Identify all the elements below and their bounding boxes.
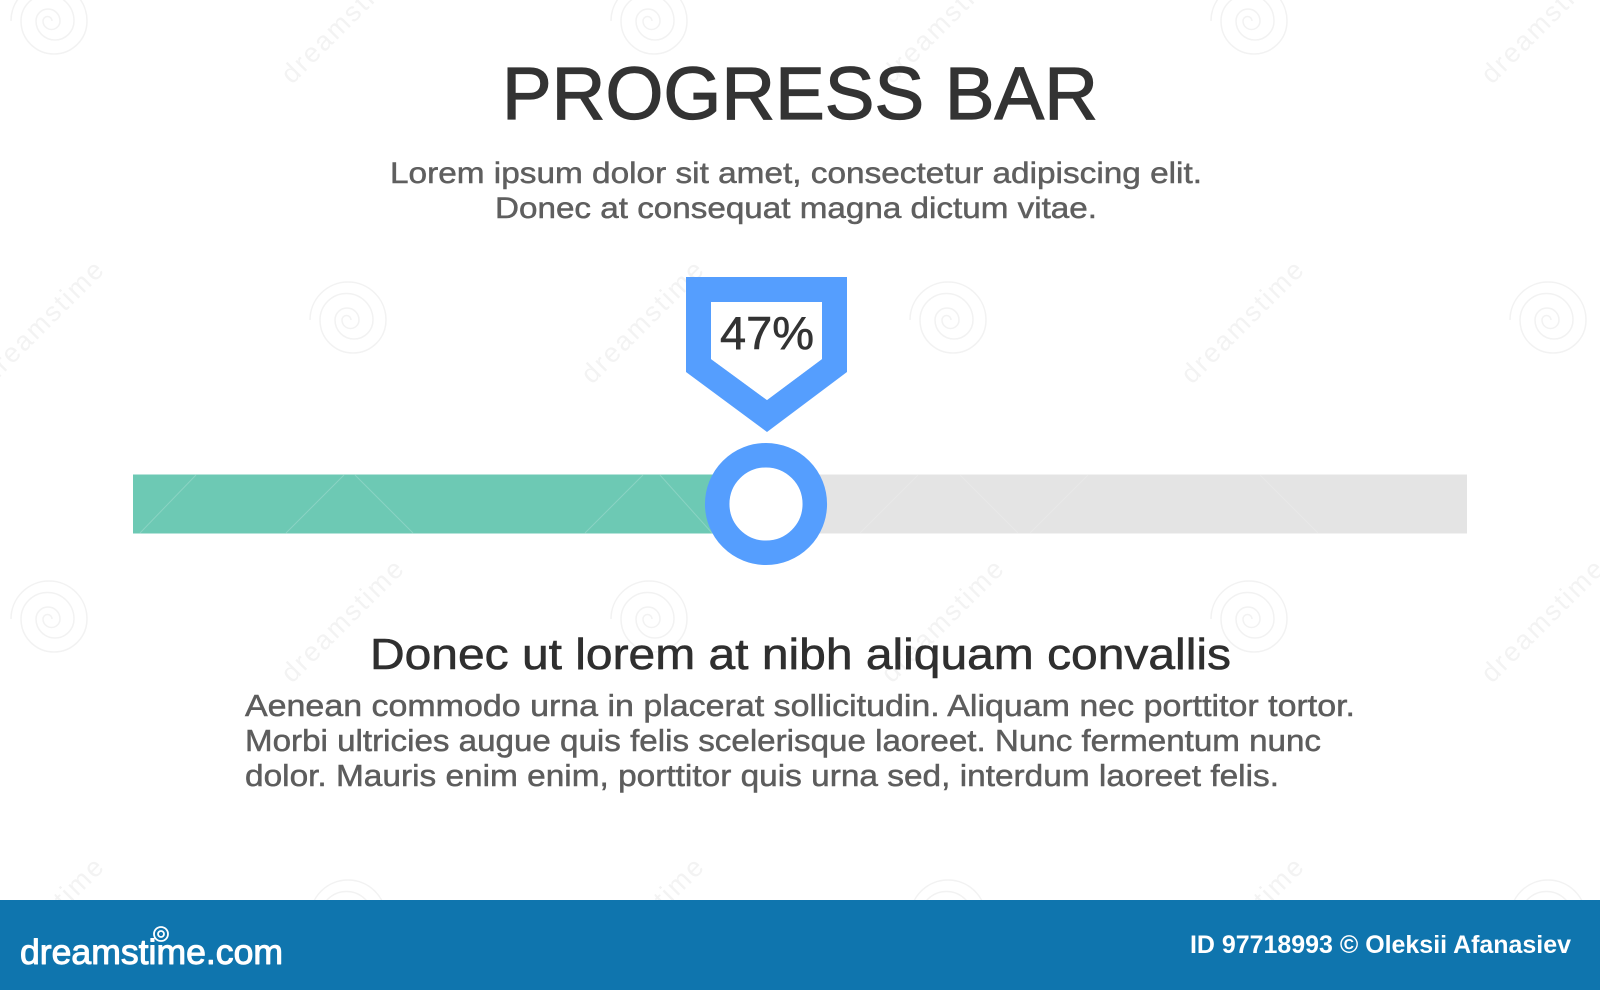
footer band xyxy=(0,900,1600,990)
watermark pattern: dreamstime xyxy=(1175,255,1309,389)
footer credit: ID 97718993 © Oleksii Afanasiev xyxy=(1190,931,1571,959)
watermark pattern: dreamstime xyxy=(275,554,409,688)
section heading: Donec ut lorem at nibh aliquam convallis xyxy=(370,630,1231,679)
track xyxy=(133,474,1467,534)
watermark pattern: dreamstime xyxy=(875,554,1009,688)
watermark pattern: dreamstime xyxy=(575,852,709,986)
watermark pattern: dreamstime xyxy=(1175,852,1309,986)
badge shape xyxy=(686,277,847,432)
icon: logo spiral xyxy=(154,927,168,941)
progress bar xyxy=(133,455,1467,553)
body paragraph xyxy=(245,688,1355,793)
body paragraph: Aenean commodo urna in placerat sollicitudin. Aliquam nec porttitor tortor. xyxy=(245,688,1355,723)
watermark pattern: dreamstime xyxy=(575,255,709,389)
filled segment xyxy=(133,474,733,534)
body paragraph: dolor. Mauris enim enim, porttitor quis urna sed, interdum laoreet felis. xyxy=(245,758,1279,793)
faint watermark lines on bar xyxy=(140,475,1318,533)
footer logo: dreamstime.com xyxy=(20,933,283,972)
body paragraph: Morbi ultricies augue quis felis scelerisque laoreet. Nunc fermentum nunc xyxy=(245,723,1321,758)
subtitle: Lorem ipsum dolor sit amet, consectetur adipiscing elit. xyxy=(390,157,1202,190)
title: PROGRESS BAR xyxy=(502,52,1098,135)
percentage badge xyxy=(686,277,847,432)
progress knob xyxy=(717,455,815,553)
percentage value: 47% xyxy=(720,307,814,359)
subtitle xyxy=(390,157,1202,225)
subtitle: Donec at consequat magna dictum vitae. xyxy=(495,192,1097,225)
